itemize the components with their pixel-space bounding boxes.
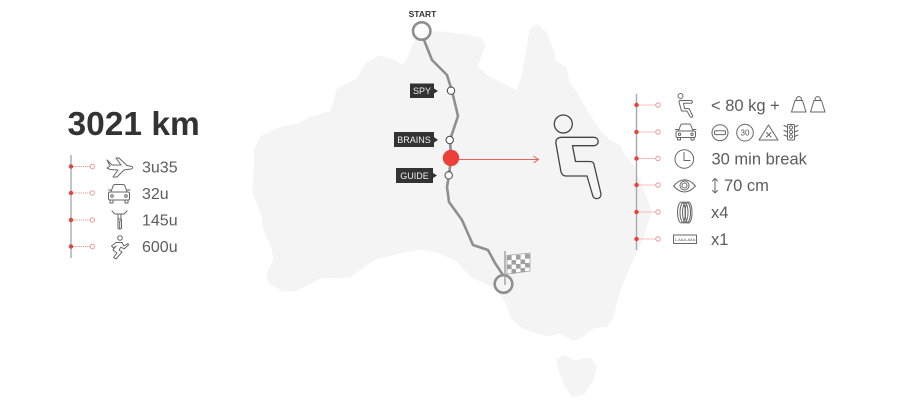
route line bbox=[424, 40, 503, 275]
icon: car bbox=[676, 124, 696, 140]
text: tire count: x4 bbox=[711, 204, 728, 222]
timeline: left bbox=[69, 155, 95, 258]
label: GUIDE bbox=[396, 168, 452, 183]
icon: licence plate: 1-AAA-AAA bbox=[675, 237, 696, 242]
icon: eye bbox=[674, 180, 696, 192]
panel: requirements bbox=[634, 94, 825, 250]
label: BRAINS: BRAINS bbox=[397, 135, 431, 145]
icon: clock bbox=[675, 150, 694, 168]
text: clearance: 70 cm bbox=[724, 177, 769, 195]
large seated person icon bbox=[554, 115, 601, 199]
icon: plane bbox=[107, 158, 133, 177]
text: plate count: x1 bbox=[711, 231, 728, 249]
label: SPY: SPY bbox=[413, 86, 431, 96]
label: BRAINS bbox=[394, 132, 453, 147]
text: weight limit: < 80 kg + bbox=[711, 97, 780, 115]
icon: small seated person bbox=[678, 94, 693, 117]
icon: warning triangle bbox=[759, 125, 778, 140]
icon: traffic light bbox=[784, 124, 798, 140]
icon: tires bbox=[678, 202, 692, 223]
Tasmania bbox=[558, 357, 595, 396]
text: car time: 32u bbox=[142, 186, 169, 203]
icon: no entry sign bbox=[712, 125, 728, 141]
icon: luggage weights bbox=[792, 97, 825, 112]
label: SPY bbox=[410, 84, 455, 98]
text: break time: 30 min break bbox=[712, 150, 808, 168]
finish marker with checkered flag bbox=[495, 251, 530, 293]
icon: licence plate bbox=[674, 235, 696, 244]
icon: bicycle bbox=[112, 211, 127, 229]
start marker: START bbox=[409, 9, 437, 19]
panel: journey summary bbox=[68, 106, 200, 259]
icon: car bbox=[108, 184, 130, 203]
red arrow from current position bbox=[443, 150, 538, 166]
icon: runner bbox=[112, 236, 128, 259]
start marker bbox=[409, 9, 437, 40]
text: plane time: 3u35 bbox=[142, 160, 178, 176]
map of Australia bbox=[254, 26, 650, 396]
text: runner time: 600u bbox=[142, 239, 178, 256]
text: bike time: 145u bbox=[142, 212, 178, 230]
timeline: right bbox=[634, 94, 660, 250]
heading: total distance: 3021 km bbox=[68, 106, 200, 143]
icon: 30 speed limit sign bbox=[737, 124, 753, 141]
label: GUIDE: GUIDE bbox=[400, 171, 429, 181]
icon: 30 speed limit sign: 30 bbox=[741, 128, 750, 138]
icon: height arrow bbox=[712, 178, 718, 193]
